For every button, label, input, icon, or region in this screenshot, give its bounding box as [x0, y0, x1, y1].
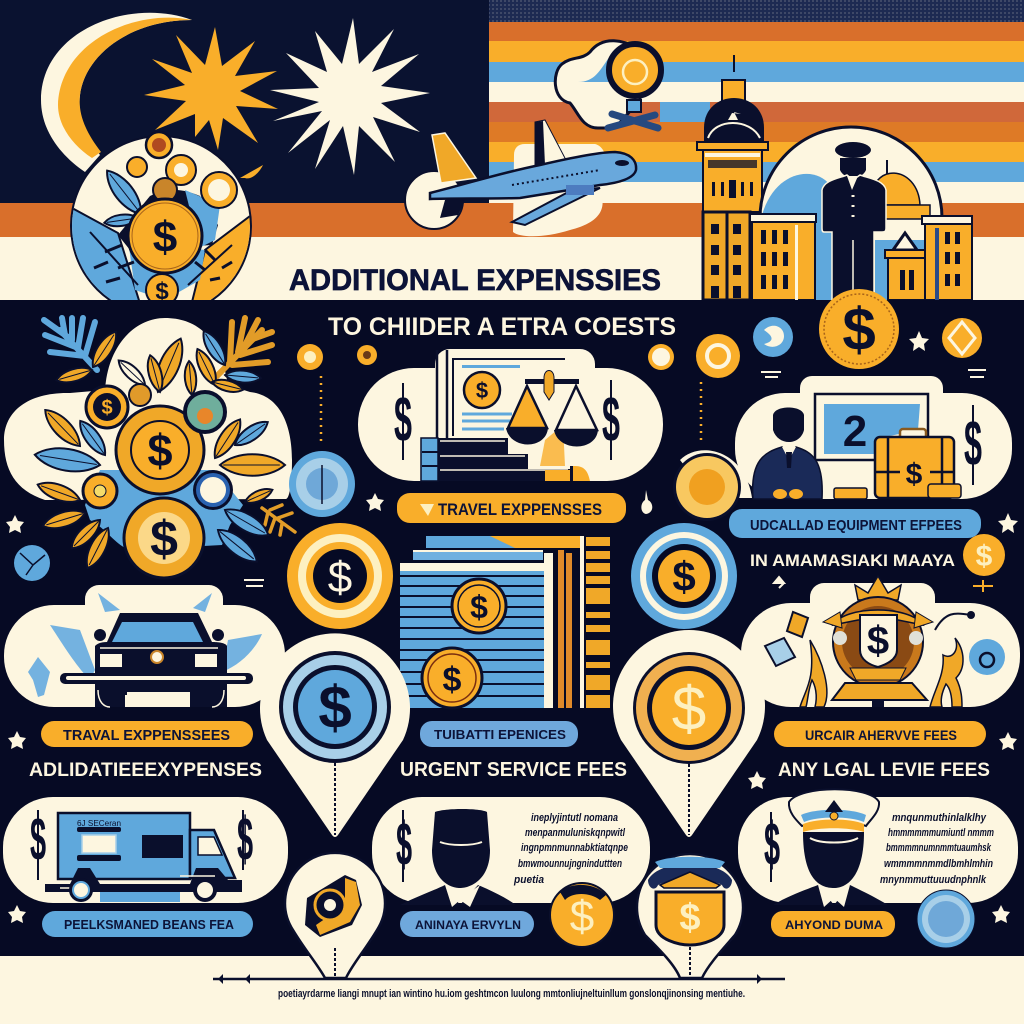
pill: ahyond duma — [771, 911, 895, 937]
panel: equipment bubble — [735, 376, 1012, 499]
chart: stack of paper with coins: $ — [470, 589, 488, 625]
icon: amber ring with dollar: $ — [328, 553, 352, 602]
panel: location pin blue: $ — [318, 674, 352, 741]
icon: coin medallion: $ — [153, 213, 177, 262]
panel: tree bubble — [4, 318, 295, 578]
icon: coin large — [116, 406, 204, 494]
icon: person in suit — [753, 408, 822, 499]
text: in amamasiaki maaya: IN AMAMASIAKI MAAYA — [750, 551, 955, 570]
text: adlidatie expenses: ADLIDATIEEEXYPENSES — [29, 760, 262, 781]
icon: crest — [823, 576, 933, 707]
icon: blue feathers — [28, 593, 262, 697]
top coin row: $ — [842, 296, 876, 363]
pill: aninaye ervyln: ANINAYA ERVYLN — [415, 918, 521, 932]
icon: right building — [922, 216, 972, 300]
icon: cream star — [270, 18, 430, 175]
icon: blue oval — [969, 639, 1005, 675]
title: ADDITIONAL EXPENSSIES — [289, 264, 661, 297]
icon: coin with cream dollar: $ — [976, 540, 993, 573]
icon: monitor — [815, 394, 928, 460]
text: footer note: poetiayrdarme liangi mnupt ian wintino hu.iom geshtmcon luulong mmtonliujneltuinllum gonslonqjinonsing mentiuhe. — [278, 988, 745, 1000]
icon: suitcase — [834, 429, 961, 499]
icon: tall dollar: $ — [396, 811, 412, 879]
icon: left flame — [800, 640, 827, 707]
icons: stars right — [748, 732, 1017, 789]
icon: coin lower: $ — [150, 511, 178, 567]
panel: legal scales bubble — [358, 349, 663, 481]
icon: captain silhouette — [773, 789, 888, 907]
header flag background — [0, 0, 1024, 237]
icon: glossy coin: $ — [570, 892, 594, 941]
subtitle: TO CHIIDER A ETRA COESTS — [328, 313, 676, 341]
pill: urgent service fees: URCAIR AHERVVE FEES — [805, 727, 957, 743]
text: urgent service fees: URGENT SERVICE FEES — [400, 759, 627, 781]
icon: document — [437, 350, 565, 440]
timeline line — [213, 978, 785, 980]
text block — [513, 812, 628, 886]
icon: flags — [765, 612, 808, 666]
icon: tall dollar: $ — [764, 811, 780, 879]
icon: blue dial — [289, 451, 355, 517]
icon: coin medallion: $ — [155, 278, 169, 305]
dark main panel — [0, 300, 1024, 956]
panel: captain bubble — [738, 789, 1018, 907]
panel: pin with cap and shield: $ — [679, 897, 701, 939]
text block: wmmmmnmmdlbmhlmhin — [884, 858, 993, 870]
pill: urgent service fees — [774, 721, 986, 747]
icons: lower stars — [8, 905, 1010, 923]
icon: coin lower — [124, 498, 204, 578]
icon: amber star — [144, 27, 278, 150]
icon: airplane — [405, 120, 636, 236]
icon: crescent moon — [41, 13, 263, 178]
icon: small decorations — [774, 513, 1018, 592]
text block: mnynmmuttuuudnphnlk — [880, 874, 987, 886]
icon: star — [8, 731, 26, 749]
pill: travel expenses: TRAVEL EXPPENSSES — [438, 500, 602, 519]
text block: ingnpmnmunnabktiatqnpe — [521, 842, 628, 854]
text block: menpanmuluniskqnpwitl — [525, 827, 626, 839]
icon: stacked books — [421, 438, 590, 481]
text block: puetia — [513, 874, 544, 886]
panel: location pin amber: $ — [672, 675, 706, 744]
icon: small temple — [885, 233, 929, 300]
panel: car bubble — [4, 585, 285, 707]
pill: equipment fees: UDCALLAD EQUIPMENT EFPEES — [750, 517, 962, 534]
icon: amber ring with dollar — [287, 523, 393, 629]
icon: mid building — [750, 214, 816, 300]
icon: amber halftone coin — [673, 450, 752, 521]
pill: aninaye ervyln — [400, 911, 534, 937]
panel: truck bubble — [3, 797, 288, 903]
icon: coin with cream dollar — [963, 534, 1005, 576]
pill: tuibatti expenses: TUIBATTI EPENICES — [434, 727, 566, 742]
icon: monitor: 2 — [843, 407, 867, 456]
pill: peelksmaned beans fea: PEELKSMANED BEANS FEA — [64, 917, 235, 932]
text block: ineplyjintutl nomana — [531, 812, 618, 824]
pill: equipment fees — [729, 509, 981, 538]
icon: tall dollar: $ — [964, 407, 982, 479]
icon: scales — [506, 370, 598, 466]
icon: tall dollar left: $ — [30, 806, 46, 874]
pill: travel expenses 2 — [41, 721, 253, 747]
icon: clock tower — [697, 55, 768, 300]
icon: small coins: $ — [101, 397, 113, 419]
text block — [880, 812, 994, 886]
pill: travel expenses 2: TRAVAL EXPPENSSEES — [63, 727, 230, 744]
panel: location pin blue — [260, 633, 410, 837]
icon: small coins — [83, 384, 233, 510]
icon: document: $ — [476, 378, 488, 403]
icon: gold dome — [862, 160, 930, 219]
pill: tuibatti expenses — [420, 721, 578, 747]
pill: peelksmaned beans fea — [42, 911, 253, 937]
panel: person bubble — [372, 797, 650, 907]
timeline bottom — [213, 974, 785, 984]
pill: ahyond duma: AHYOND DUMA — [785, 918, 883, 932]
text: any legal levie fees: ANY LGAL LEVIE FEES — [778, 760, 990, 781]
panel: pin with cap and shield — [637, 854, 743, 978]
icon: coin large: $ — [147, 425, 173, 476]
icon: blue ring with dollar — [631, 523, 737, 629]
buildings and officer — [697, 55, 972, 300]
icon: crest: $ — [867, 619, 889, 663]
icon: truck — [45, 813, 242, 902]
icon: small stars and globe — [6, 490, 652, 586]
icon: car — [60, 613, 253, 707]
icon: blue seal — [917, 890, 975, 948]
icon: right flame — [930, 638, 963, 707]
fronds — [44, 318, 295, 535]
top coin row — [297, 289, 986, 442]
panel: pin with camera — [285, 853, 385, 978]
leaves — [33, 328, 285, 571]
panel: crest bubble — [741, 576, 1020, 707]
chart: stack of paper with coins: $ — [443, 661, 462, 699]
icon: wire — [935, 614, 970, 630]
icon: truck: 6J SECeran — [77, 819, 121, 828]
icon: cloud with coin — [555, 41, 661, 128]
chart: stack of paper with coins — [400, 536, 610, 708]
icon: blue base — [85, 470, 243, 550]
pill: travel expenses — [397, 493, 626, 523]
panel: location pin amber — [613, 630, 765, 837]
icon: officer silhouette — [822, 142, 886, 300]
text block: mnqunmuthinlalklhy — [892, 812, 987, 824]
icon: blue ring with dollar: $ — [672, 553, 696, 600]
icon: person silhouette — [400, 809, 516, 907]
icon: tall dollar right: $ — [602, 383, 620, 455]
arch panel — [760, 127, 942, 300]
icon: glossy coin — [550, 883, 614, 947]
icon: tall dollar right: $ — [237, 806, 253, 874]
text block: bmwmounnujngninduttten — [518, 858, 622, 870]
icon: coin medallion — [70, 133, 252, 300]
icon: tall dollar left: $ — [394, 383, 412, 455]
icon: suitcase: $ — [906, 458, 923, 491]
